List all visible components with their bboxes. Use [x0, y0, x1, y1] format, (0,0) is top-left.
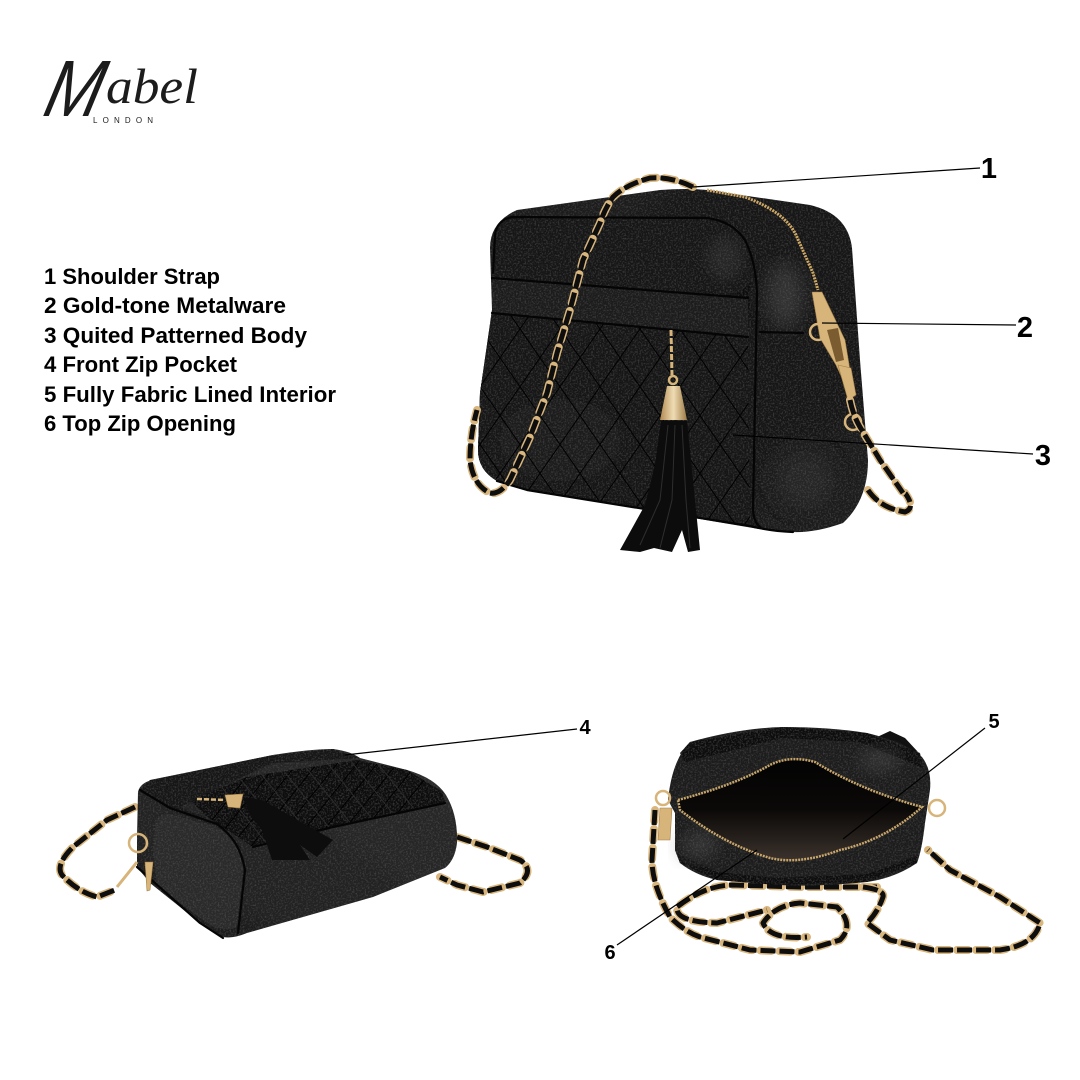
open interior lining	[678, 759, 922, 860]
main bag: three-quarter view	[466, 174, 914, 552]
feature list	[44, 264, 336, 436]
callout 6	[604, 850, 757, 964]
bag body	[137, 749, 457, 937]
bag body	[478, 189, 868, 532]
tassel peek	[875, 731, 918, 752]
logo: Mabel London: M	[37, 44, 115, 134]
callout 6: 6	[604, 942, 616, 964]
bottom-left bag: underside view	[60, 749, 527, 938]
piping seams	[492, 217, 803, 532]
feature 6: 6 Top Zip Opening	[44, 411, 236, 436]
tassel	[243, 797, 333, 860]
feature 4: 4 Front Zip Pocket	[44, 352, 238, 377]
logo: Mabel London: abel	[106, 58, 198, 114]
quilting	[212, 760, 424, 846]
hardware	[117, 794, 243, 891]
callout 3: 3	[1035, 440, 1051, 472]
right chain	[440, 837, 528, 892]
quilted diamond stitching	[478, 316, 750, 524]
callout 5: 5	[988, 711, 1000, 733]
top zip	[707, 190, 818, 290]
infographic canvas	[43, 61, 1050, 959]
feature 3: 3 Quited Patterned Body	[44, 323, 308, 348]
left chain	[60, 807, 135, 897]
tassel	[620, 330, 700, 552]
bottom-right bag: open top view	[652, 727, 1040, 952]
feature 5: 5 Fully Fabric Lined Interior	[44, 382, 336, 407]
callout 1: 1	[981, 153, 997, 185]
feature 1: 1 Shoulder Strap	[44, 264, 220, 289]
zip hardware	[810, 292, 861, 430]
callout 3	[733, 435, 1051, 472]
callout 4: 4	[579, 717, 591, 739]
hardware	[656, 791, 945, 840]
callout 1	[693, 153, 997, 187]
logo: Mabel London	[37, 44, 198, 134]
front chain strap	[470, 178, 693, 493]
long chain loop	[652, 810, 1040, 952]
piping	[137, 790, 445, 938]
back chain behind bag	[868, 490, 910, 512]
callout 4	[345, 717, 591, 755]
bag body	[668, 727, 930, 886]
logo: Mabel London: LONDON	[93, 116, 153, 125]
right chain	[850, 400, 903, 493]
callout 5	[843, 711, 1000, 839]
feature 2: 2 Gold-tone Metalware	[44, 293, 286, 318]
callout 2: 2	[1017, 312, 1033, 344]
